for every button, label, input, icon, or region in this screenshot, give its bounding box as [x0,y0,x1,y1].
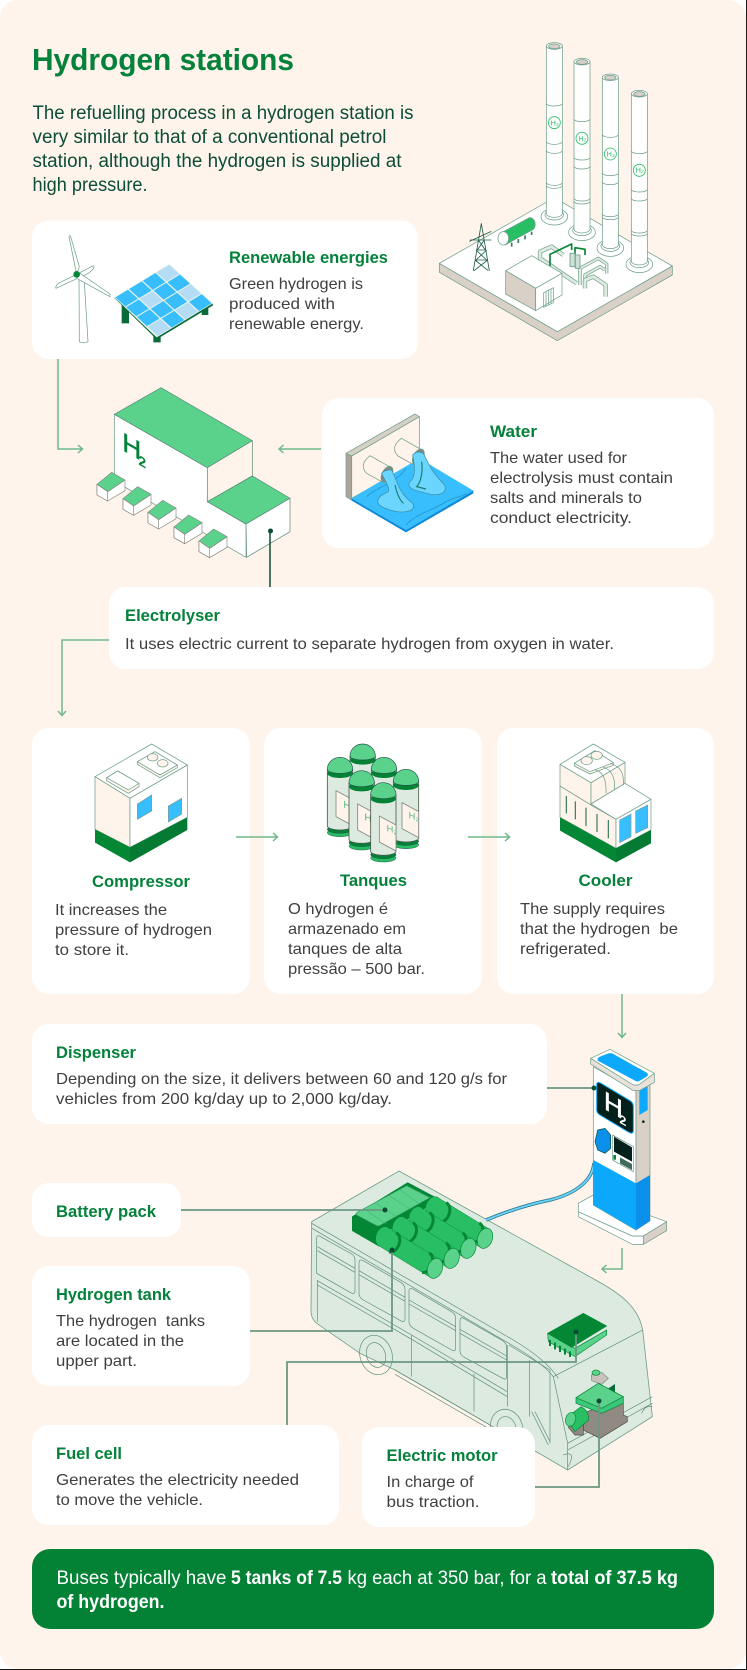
side wall [207,441,252,502]
panel: tanks [264,728,482,994]
body text: vehicles from 200 kg/day up to 2,000 kg/day. [56,1091,392,1108]
body text: tanques de alta [288,941,402,958]
callout text: kg each at 350 bar, for a [348,1568,547,1589]
body text: Depending on the size, it delivers between 60 and 120 g/s for [56,1071,508,1088]
body text: It uses electric current to separate hydrogen from oxygen in water. [125,636,614,653]
panel: electrolyser [109,587,714,669]
body text: are located in the [56,1333,184,1350]
leader: dispenser [547,1086,596,1090]
arrow: renewable energies to electrolyser [58,359,82,453]
body text: to move the vehicle. [56,1492,203,1509]
body text [520,901,678,958]
icon: solar panel [114,264,213,342]
card [322,398,714,548]
column [593,1067,650,1230]
storage stacks: H₂ [551,118,559,127]
H2 label [122,427,146,472]
body text: refrigerated. [520,941,611,958]
intro text: The refuelling process in a hydrogen station is [32,103,414,124]
icon: bus with fuel system [311,1171,652,1470]
bus body [311,1171,652,1470]
H2 sign: 2 [619,1112,627,1130]
heading: Compressor [92,872,190,891]
small modules [97,472,227,558]
icon: compressor [95,744,187,862]
icon: hydrogen tanks: H₂ [387,823,397,837]
card [264,728,482,994]
panel: dispenser [32,1024,547,1124]
pipes [540,244,607,297]
body text: Green hydrogen is [229,276,363,293]
intro text: station, although the hydrogen is supplied at [32,151,402,172]
panel: water [322,398,714,548]
body text [288,901,425,978]
icon: water pipes [346,414,473,532]
arrow: compressor to tanks [236,833,278,841]
icon: wind turbine [56,236,110,343]
heading: Cooler [578,871,633,890]
leader: battery pack [181,1208,388,1212]
body text: The hydrogen tanks [56,1313,205,1330]
hose [486,1163,594,1220]
hydrogen tanks on roof [373,1194,495,1281]
panel: hydrogen tank [32,1266,250,1386]
icon: hydrogen production plant [439,43,672,341]
card [497,728,714,994]
battery pack [352,1183,434,1246]
H2 label: 2 [138,452,146,472]
top cap [591,1049,654,1091]
body text [55,902,212,959]
arrow: dispenser to bus [602,1248,622,1273]
callout text: 5 tanks of 7.5 [231,1568,342,1589]
arrow: water to electrolyser [279,445,321,453]
gas tank [498,218,535,247]
leader: electrolyser [268,528,273,587]
card [32,1425,339,1525]
H2 sign: H [604,1085,623,1125]
callout text [56,1568,678,1613]
icon: hydrogen tanks: H [364,812,372,825]
H2 sign [597,1082,633,1133]
callout text: of hydrogen. [56,1592,164,1613]
body text [56,1472,299,1509]
intro text: high pressure. [32,175,148,196]
leader: electric motor [535,1398,602,1487]
body text: The water used for [490,450,628,467]
panel: renewable energies [32,220,418,359]
heading: Battery pack [56,1202,157,1221]
card [32,728,250,994]
arrow: cooler to dispenser [618,994,626,1038]
panel: battery pack [32,1183,181,1237]
electric motor [564,1370,627,1438]
card [32,1266,250,1386]
main roof [114,388,252,468]
intro text [32,103,414,196]
heading: Tanques [340,871,407,890]
intro text: very similar to that of a conventional petrol [32,127,386,148]
body text: pressure of hydrogen [55,922,212,939]
body text [490,450,673,527]
body text: bus traction. [386,1494,480,1511]
card [32,1024,547,1124]
body text: produced with [229,296,335,313]
body text [56,1071,508,1108]
callout text: Buses typically have [56,1568,226,1589]
icon: hydrogen tanks: H [343,800,351,812]
heading: Electric motor [386,1446,498,1465]
arrow: tanks to cooler [468,833,510,841]
storage stacks: H₂ [636,166,644,175]
heading: Renewable energies [229,248,388,267]
panel: cooler [497,728,714,994]
body text: O hydrogen é [288,901,388,918]
panel: electric motor [362,1427,535,1527]
heading: Water [490,422,537,441]
base [578,1195,667,1244]
card [32,220,418,359]
body text: The supply requires [520,901,665,918]
body text: It increases the [55,902,167,919]
storage stacks: H₂ [607,149,615,158]
body text: salts and minerals to [490,490,642,507]
building body [114,414,246,557]
annex wall [246,498,290,557]
storage stacks [541,43,653,273]
body text [229,276,364,333]
heading: Electrolyser [125,606,220,625]
title: Hydrogen stations [32,42,294,77]
body text: conduct electricity. [490,510,632,527]
body text: upper part. [56,1353,137,1370]
body text: to store it. [55,942,129,959]
icon: hydrogen tanks: H₂ [409,810,419,824]
body text: that the hydrogen be [520,921,678,938]
body text [386,1474,480,1511]
H2 label: H [122,427,141,466]
body text: In charge of [386,1474,474,1491]
annex roof [207,476,290,524]
icon: cooler [560,744,651,862]
body text: Generates the electricity needed [56,1472,299,1489]
bus panels and windows [312,1223,652,1470]
platform [439,198,672,341]
icon: electrolyser building [97,388,290,558]
body text: armazenado em [288,921,406,938]
body text [56,1313,205,1370]
utility building [506,256,562,311]
card [362,1427,535,1527]
heading: Hydrogen tank [56,1285,172,1304]
leader: hydrogen tank [250,1248,394,1331]
green panel [32,1549,714,1629]
arrow: electrolyser to compressor [58,640,109,716]
card [109,587,714,669]
heading: Dispenser [56,1043,136,1062]
icon: hydrogen tanks [327,744,419,862]
callout: tank capacity [32,1549,714,1629]
body text: pressão – 500 bar. [288,961,425,978]
pylon [469,223,491,271]
icon: hydrogen dispenser [578,1049,667,1244]
leader: fuel cell [287,1330,578,1425]
heading: Fuel cell [56,1444,122,1463]
panel: fuel cell [32,1425,339,1525]
card [32,1183,181,1237]
callout text: total of 37.5 kg [551,1568,678,1589]
panel: compressor [32,728,250,994]
storage stacks: H₂ [578,134,587,143]
fuel cell [548,1313,607,1357]
body text: renewable energy. [229,316,364,333]
body text: electrolysis must contain [490,470,673,487]
controls [595,1128,633,1172]
